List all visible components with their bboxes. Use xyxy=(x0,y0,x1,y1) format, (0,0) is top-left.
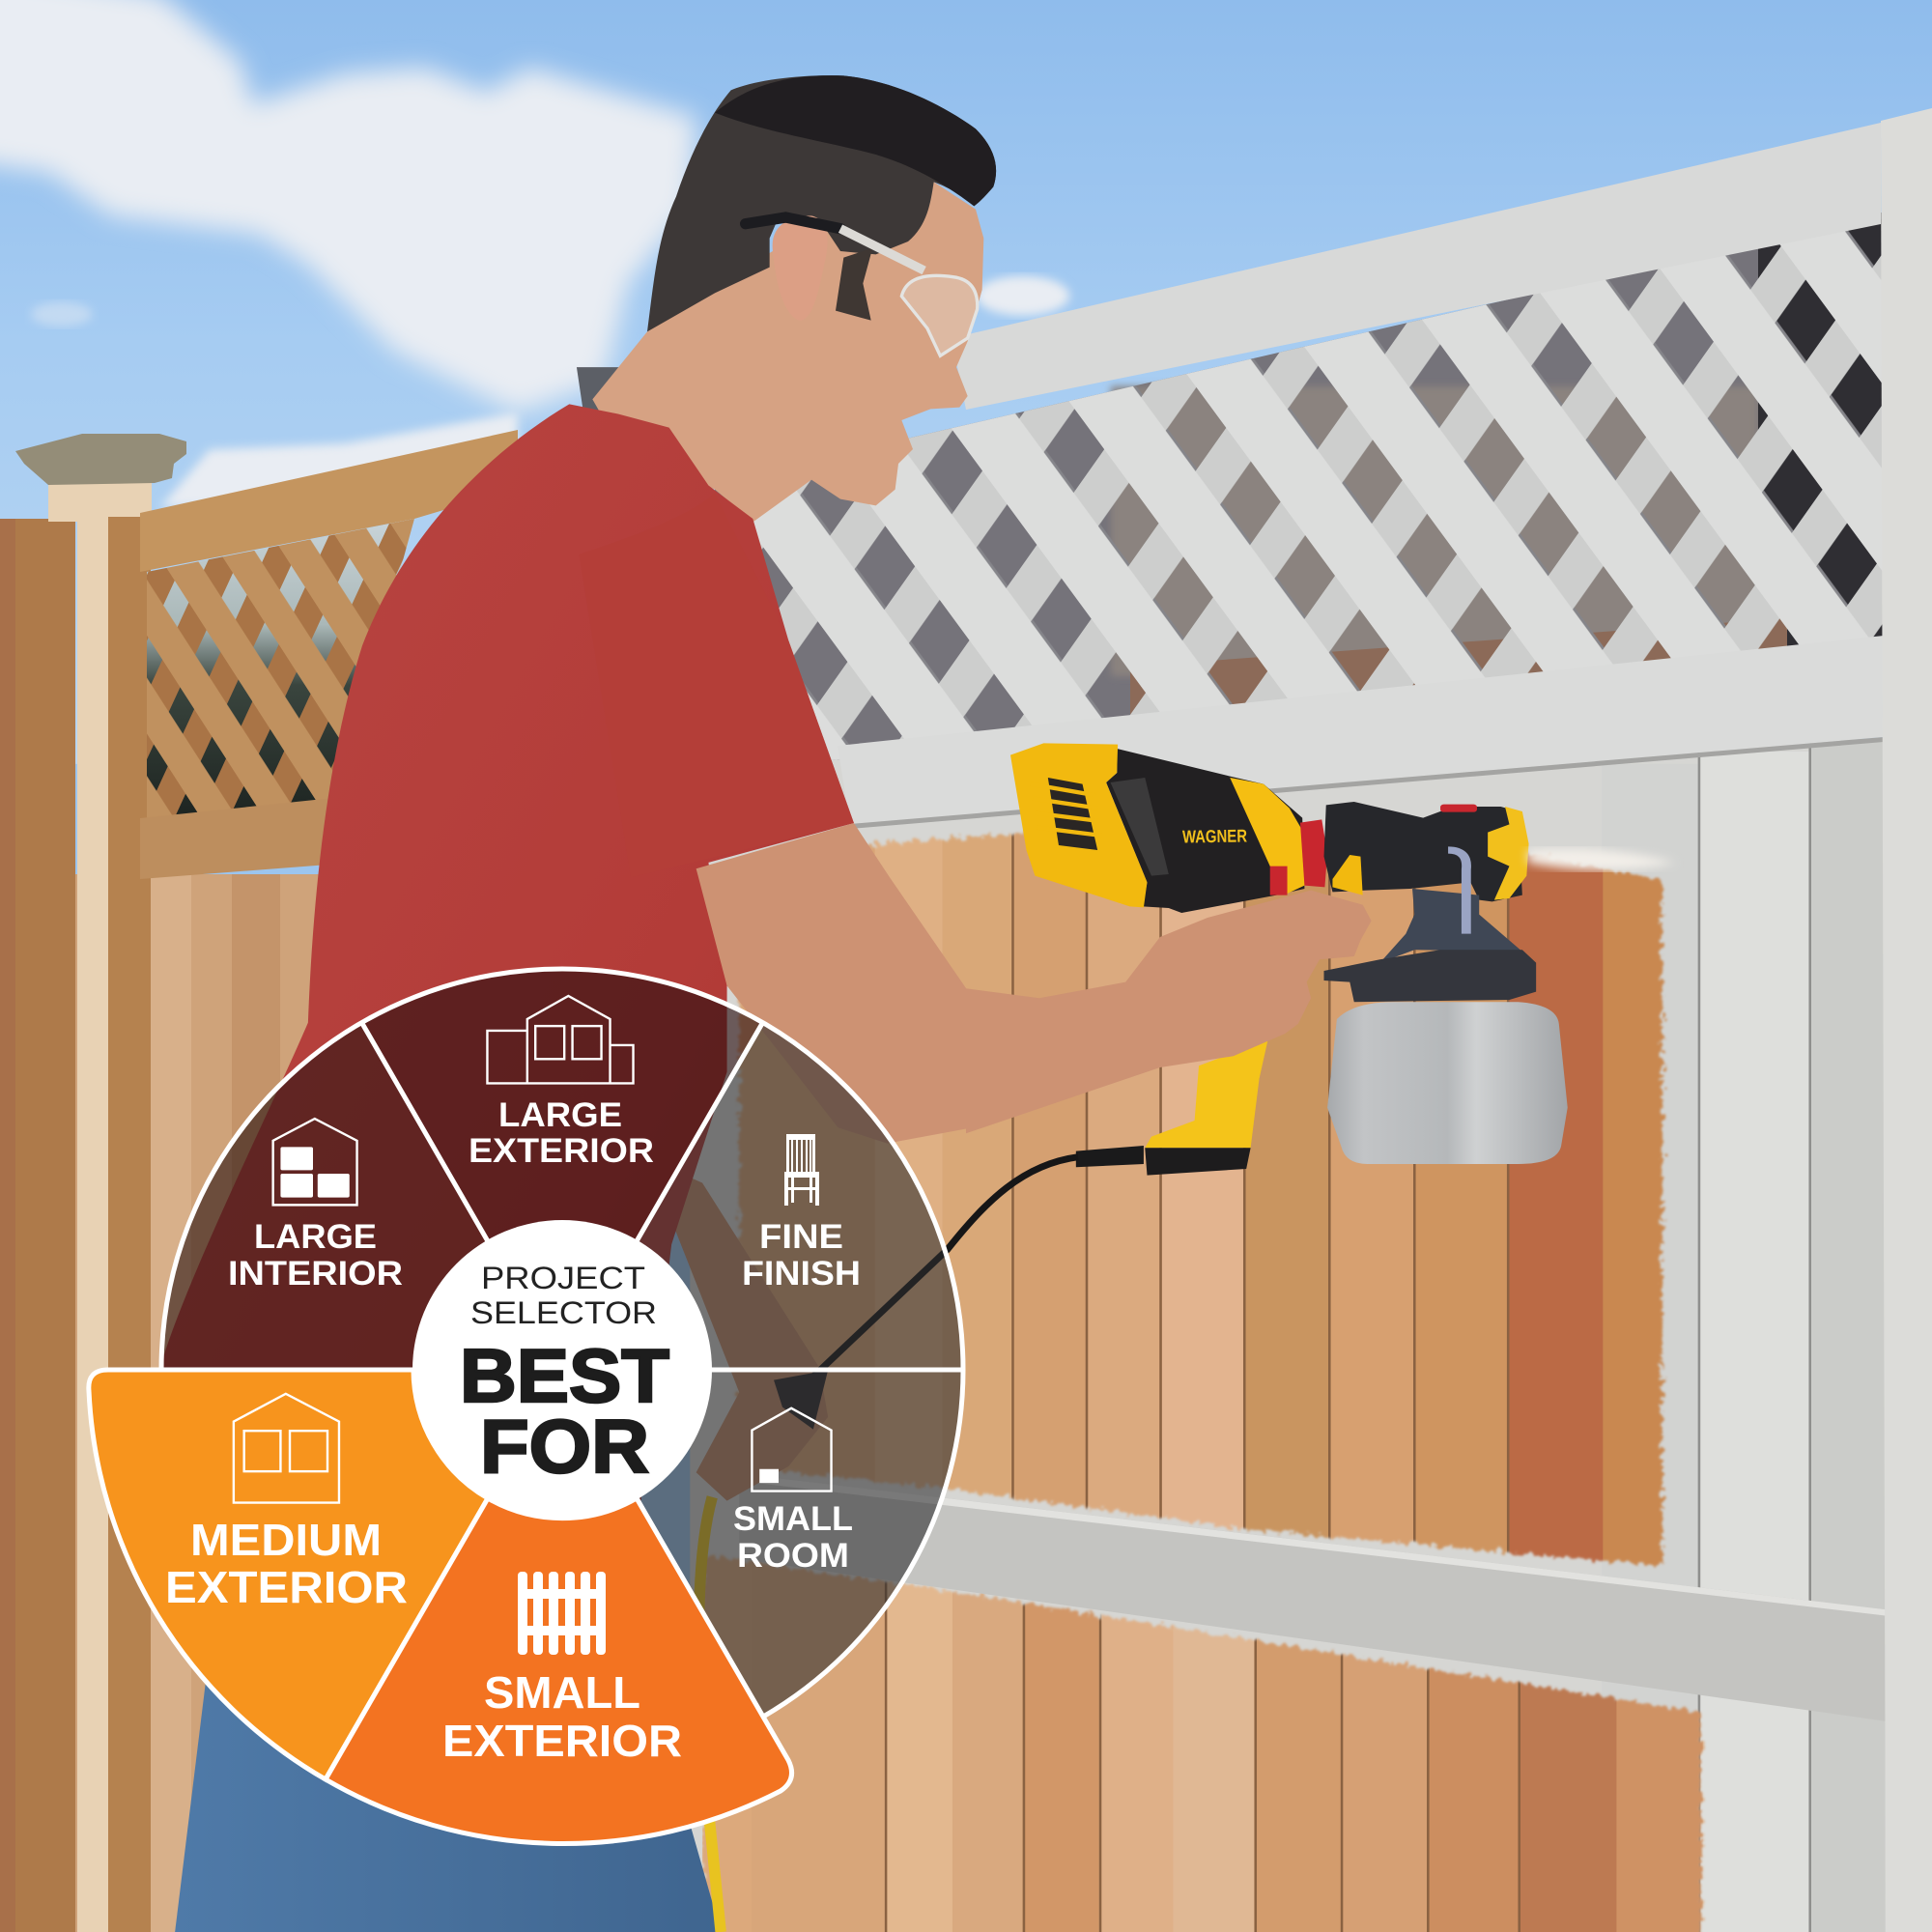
center text xyxy=(460,1261,669,1489)
center circle xyxy=(412,1220,712,1520)
segment: small room xyxy=(637,1370,963,1717)
left lattice xyxy=(147,519,414,821)
man: upper hair xyxy=(715,75,996,206)
label: large interior: LARGE xyxy=(254,1218,377,1256)
white painted fence boards xyxy=(690,739,1932,1932)
label: small exterior: SMALL xyxy=(484,1667,640,1718)
right stile xyxy=(108,517,151,1932)
sprayer: lid xyxy=(1324,950,1536,1002)
man: jeans xyxy=(175,1651,721,1932)
man: torso and near arm xyxy=(160,404,974,1658)
yellow hose xyxy=(698,1497,721,1932)
white fence top rail xyxy=(952,123,1881,410)
man: sideburn xyxy=(836,248,872,321)
icon: picket fence xyxy=(518,1572,606,1655)
paint sprayer gun xyxy=(966,743,1568,1176)
far left lattice panel xyxy=(0,519,17,1932)
sprayer hose grip xyxy=(774,1370,828,1430)
sprayer: yellow side panel xyxy=(1230,778,1304,894)
sprayer: red button xyxy=(1440,805,1477,812)
sprayer: red ring xyxy=(1300,819,1327,887)
icon: small room house xyxy=(752,1408,832,1492)
sprayer: yellow handle xyxy=(1145,1040,1267,1148)
label: medium exterior: MEDIUM xyxy=(190,1515,382,1565)
man: head xyxy=(592,75,996,522)
icon: large exterior buildings xyxy=(487,996,634,1083)
scene foreground details xyxy=(698,849,1676,1932)
label: small exterior xyxy=(442,1667,682,1766)
unpainted wood patch lower xyxy=(702,1552,1713,1932)
label: large interior: INTERIOR xyxy=(228,1255,403,1293)
icon: chair xyxy=(784,1134,819,1206)
project selector wheel xyxy=(89,969,963,1843)
background house roof xyxy=(577,367,629,425)
left boards below rail xyxy=(0,874,328,1932)
lower grey rail xyxy=(739,1474,1904,1723)
sprayer: cord grommet xyxy=(1076,1146,1144,1167)
icon: large interior house xyxy=(273,1119,357,1205)
left middle rail xyxy=(140,798,333,879)
sprayer: paint jar xyxy=(1327,1002,1568,1164)
wheel outline and spokes xyxy=(161,969,963,1717)
sprayer: motor body xyxy=(1106,749,1304,913)
left top rail xyxy=(140,430,518,572)
man: red t-shirt xyxy=(160,404,854,1658)
sprayer: yellow nozzle xyxy=(1488,807,1529,900)
label: fine finish: FINE xyxy=(759,1218,843,1256)
label: small room: ROOM xyxy=(737,1537,849,1575)
white lattice xyxy=(715,213,1884,773)
label: large exterior: EXTERIOR xyxy=(469,1132,654,1170)
light post xyxy=(48,480,152,1932)
sprayer: brand name: WAGNER xyxy=(1182,825,1247,847)
sprayer: yellow rear housing xyxy=(1010,743,1147,907)
left lattice gap colours xyxy=(147,519,414,821)
sprayer: neck xyxy=(1380,889,1522,963)
segment: fine finish xyxy=(637,1023,963,1370)
segment: medium exterior (orange) xyxy=(89,1370,488,1779)
lattice gaps: houses seen behind xyxy=(715,213,1884,773)
man: hair xyxy=(647,75,996,331)
label: large exterior xyxy=(469,1096,654,1170)
man: safety glasses xyxy=(746,217,978,355)
label: large interior xyxy=(228,1218,403,1293)
sky xyxy=(0,0,1932,764)
natural wood fence left xyxy=(0,430,518,1932)
man: face and neck xyxy=(592,182,983,522)
label: fine finish: FINISH xyxy=(742,1255,861,1293)
left post cap xyxy=(15,434,186,485)
left stile xyxy=(15,519,75,1932)
sprayer: pickup tube xyxy=(1448,850,1466,934)
man: near arm xyxy=(696,823,974,1144)
label: small room: SMALL xyxy=(733,1500,853,1538)
label: fine finish xyxy=(742,1218,861,1293)
man: far forearm xyxy=(647,1158,828,1501)
sprayer: small yellow trigger guard xyxy=(1332,855,1363,895)
hand gripping sprayer xyxy=(966,891,1372,1133)
man: ear xyxy=(773,215,828,321)
white fence right post xyxy=(1881,108,1932,1932)
label: medium exterior: EXTERIOR xyxy=(165,1562,408,1612)
sprayer: red switch xyxy=(1270,867,1288,895)
man: sleeve hem xyxy=(579,493,854,877)
white fence middle rail xyxy=(838,636,1884,824)
sprayer: handle base xyxy=(1145,1148,1251,1176)
segment: small exterior (orange) xyxy=(326,1498,792,1843)
center text: BEST xyxy=(460,1333,669,1418)
sprayer: side grille xyxy=(1111,778,1169,876)
segment: large exterior xyxy=(361,969,763,1241)
icon: medium exterior house xyxy=(234,1394,339,1503)
label: medium exterior xyxy=(165,1515,408,1612)
label: small room xyxy=(733,1500,853,1575)
segment: large interior xyxy=(161,1023,488,1370)
paint mist xyxy=(1528,849,1676,870)
center text: PROJECT xyxy=(481,1261,645,1295)
clouds xyxy=(0,0,1069,508)
label: small exterior: EXTERIOR xyxy=(442,1716,682,1766)
power cord xyxy=(807,1157,1078,1382)
center text: SELECTOR xyxy=(470,1295,657,1330)
sprayer: black head xyxy=(1324,802,1522,901)
center text: FOR xyxy=(480,1404,649,1489)
unpainted wood patch upper xyxy=(727,826,1677,1589)
label: large exterior: LARGE xyxy=(498,1096,622,1134)
sprayer: vents xyxy=(1031,778,1102,850)
man: lower body and far arm xyxy=(175,1158,828,1932)
